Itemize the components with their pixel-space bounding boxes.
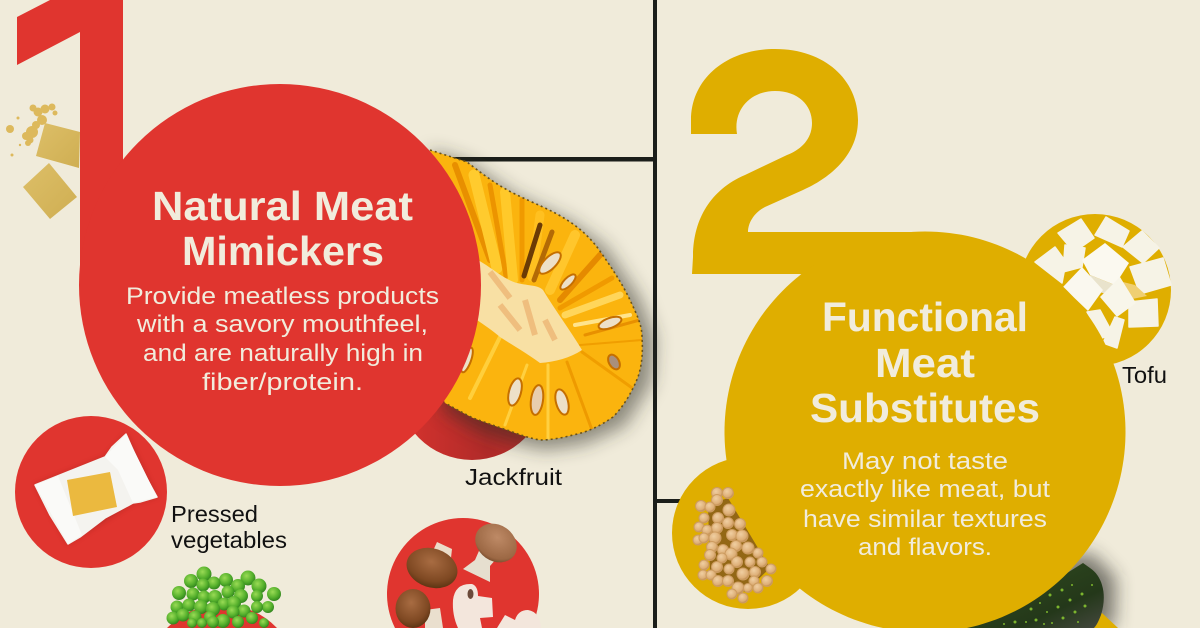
icon: tofu cubes	[1019, 214, 1171, 366]
jackfruit backing circle	[397, 310, 547, 460]
jackfruit core	[477, 260, 582, 363]
description text: fiber/protein.	[202, 369, 363, 396]
description text: have similar textures	[803, 506, 1047, 533]
description text	[126, 283, 439, 396]
panel: natural meat mimickers	[79, 84, 481, 486]
heading: functional meat substitutes: Substitutes	[810, 385, 1040, 431]
description text: May not taste	[842, 448, 1008, 475]
label: pressed vegetables: Pressed	[171, 501, 258, 527]
label: jackfruit: Jackfruit	[465, 464, 563, 490]
heading: functional meat substitutes	[810, 294, 1040, 431]
label: pressed vegetables	[171, 501, 287, 553]
icon: stock cubes and crumbs	[6, 104, 80, 219]
description text: Provide meatless products	[126, 283, 439, 310]
number 2	[691, 49, 925, 300]
label: tofu: Tofu	[1122, 362, 1167, 388]
icon: soy chunks	[672, 457, 824, 609]
heading: natural meat mimickers: Natural Meat	[152, 183, 413, 229]
icon: zucchini	[960, 552, 1118, 628]
description text: and flavors.	[858, 534, 992, 561]
icon: green peas	[166, 566, 281, 628]
number 1	[17, 0, 123, 300]
description text: exactly like meat, but	[800, 476, 1050, 503]
icon: pressed vegetables	[15, 416, 167, 568]
heading: functional meat substitutes: Functional	[822, 294, 1028, 340]
description text: and are naturally high in	[143, 340, 423, 367]
icon: mushrooms	[387, 516, 541, 628]
label: pressed vegetables: vegetables	[171, 527, 287, 553]
layout divider lines	[430, 0, 685, 628]
heading: natural meat mimickers	[152, 183, 413, 274]
description text: with a savory mouthfeel,	[136, 311, 428, 338]
heading: functional meat substitutes: Meat	[875, 340, 975, 386]
description text	[800, 448, 1050, 561]
heading: natural meat mimickers: Mimickers	[182, 228, 384, 274]
panel: functional meat substitutes	[724, 231, 1126, 628]
icon: jackfruit	[400, 150, 655, 450]
